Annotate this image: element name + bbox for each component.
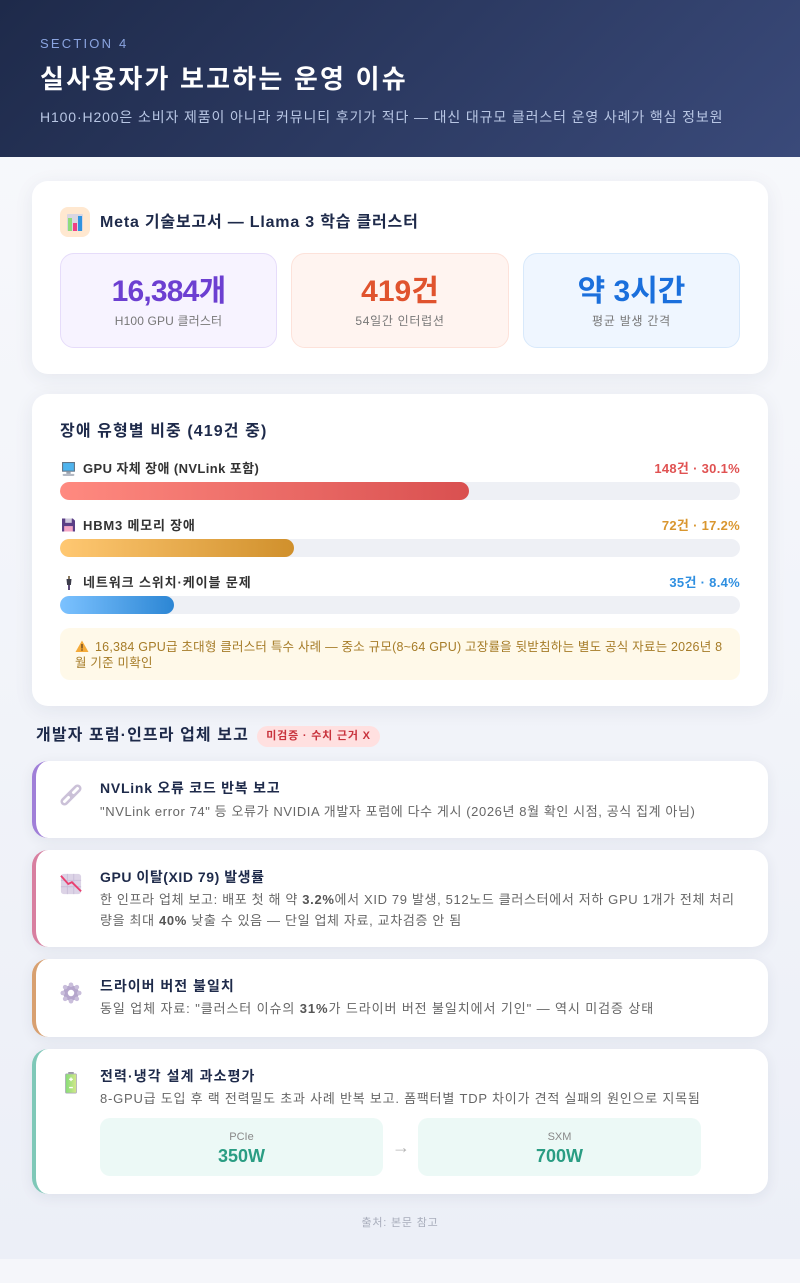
card text: 8-GPU급 도입 후 랙 전력밀도 초과 사례 반복 보고. 폼팩터별 TDP 차이가 견적 실패의 원인으로 지목됨 bbox=[100, 1091, 701, 1106]
value: 419건 bbox=[361, 275, 439, 308]
form factor label: PCIe bbox=[229, 1131, 254, 1143]
card title: GPU 이탈(XID 79) 발생률 bbox=[100, 869, 265, 885]
icon: warning bbox=[76, 640, 88, 652]
panel heading: 장애 유형별 비중 (419건 중) bbox=[60, 423, 267, 440]
icon: battery bbox=[65, 1072, 77, 1094]
report card: XID 79 bbox=[32, 850, 768, 947]
icon: gear bbox=[60, 982, 82, 1004]
note text bbox=[75, 640, 722, 670]
icon: computer bbox=[62, 462, 75, 476]
callout: caveat note bbox=[60, 628, 740, 680]
bar: HBM3 memory bbox=[60, 539, 740, 557]
icon: falling chart bbox=[60, 874, 82, 894]
value: 16,384개 bbox=[112, 275, 225, 308]
bar: GPU failure bbox=[60, 482, 740, 500]
caption: 평균 발생 간격 bbox=[592, 314, 671, 328]
SXM power box bbox=[418, 1118, 701, 1176]
bar: network bbox=[60, 596, 740, 614]
stat: interval bbox=[523, 253, 740, 348]
card text: 량을 최대 40% 낮출 수 있음 — 단일 업체 자료, 교차검증 안 됨 bbox=[100, 913, 462, 928]
value: network: 35건 · 8.4% bbox=[669, 575, 740, 590]
report card: driver mismatch bbox=[32, 959, 768, 1037]
PCIe power box bbox=[100, 1118, 383, 1176]
panel heading: Meta 기술보고서 — Llama 3 학습 클러스터 bbox=[100, 214, 419, 231]
power value: 350W bbox=[218, 1146, 265, 1166]
form factor label: SXM bbox=[548, 1131, 571, 1143]
icon: bar chart bbox=[60, 207, 90, 237]
section label: SECTION 4 bbox=[40, 36, 128, 51]
card text: 한 인프라 업체 보고: 배포 첫 해 약 3.2%에서 XID 79 발생, 512노드 클러스터에서 저하 GPU 1개가 전체 처리 bbox=[100, 892, 735, 907]
panel: failure type share bbox=[32, 394, 768, 706]
arrow: → bbox=[392, 1137, 410, 1157]
caption: H100 GPU 클러스터 bbox=[115, 314, 222, 328]
report card: power and cooling bbox=[32, 1049, 768, 1194]
title: 실사용자가 보고하는 운영 이슈 bbox=[40, 64, 408, 94]
badge: unverified bbox=[257, 726, 380, 747]
caption: 54일간 인터럽션 bbox=[355, 314, 445, 328]
badge: unverified: 미검증 · 수치 근거 X bbox=[266, 730, 371, 742]
icon: link bbox=[60, 784, 82, 806]
stat: GPU cluster bbox=[60, 253, 277, 348]
card title: NVLink 오류 코드 반복 보고 bbox=[100, 780, 280, 796]
panel: Meta report bbox=[32, 181, 768, 374]
label: network: 네트워크 스위치·케이블 문제 bbox=[83, 575, 252, 590]
value: HBM3 memory: 72건 · 17.2% bbox=[662, 518, 740, 533]
label: HBM3 memory: HBM3 메모리 장애 bbox=[83, 518, 196, 533]
value: GPU failure: 148건 · 30.1% bbox=[654, 461, 740, 476]
section heading: 개발자 포럼·인프라 업체 보고 bbox=[36, 727, 249, 744]
card text bbox=[100, 892, 735, 928]
card title: 드라이버 버전 불일치 bbox=[100, 978, 235, 994]
label: GPU failure: GPU 자체 장애 (NVLink 포함) bbox=[83, 461, 259, 476]
note text: 16,384 GPU급 초대형 클러스터 특수 사례 — 중소 규모(8~64 GPU) 고장률을 뒷받침하는 별도 공식 자료는 2026년 8 bbox=[95, 640, 722, 654]
card text: 동일 업체 자료: "클러스터 이슈의 31%가 드라이버 버전 불일치에서 기인" — 역시 미검증 상태 bbox=[100, 1001, 654, 1016]
power value: 700W bbox=[536, 1146, 583, 1166]
icon: plug bbox=[66, 576, 72, 590]
source footer: 출처: 본문 참고 bbox=[361, 1217, 439, 1229]
card text: "NVLink error 74" 등 오류가 NVIDIA 개발자 포럼에 다수 게시 (2026년 8월 확인 시점, 공식 집계 아님) bbox=[100, 804, 695, 819]
value: 약 3시간 bbox=[578, 275, 685, 308]
icon: floppy disk bbox=[62, 518, 75, 532]
stat: interruptions bbox=[291, 253, 509, 348]
header banner bbox=[0, 0, 800, 157]
report card: NVLink bbox=[32, 761, 768, 838]
card title: 전력·냉각 설계 과소평가 bbox=[100, 1068, 256, 1084]
subtitle: H100·H200은 소비자 제품이 아니라 커뮤니티 후기가 적다 — 대신 대규모 클러스터 운영 사례가 핵심 정보원 bbox=[40, 109, 723, 125]
note text: 월 기준 미확인 bbox=[75, 656, 153, 670]
